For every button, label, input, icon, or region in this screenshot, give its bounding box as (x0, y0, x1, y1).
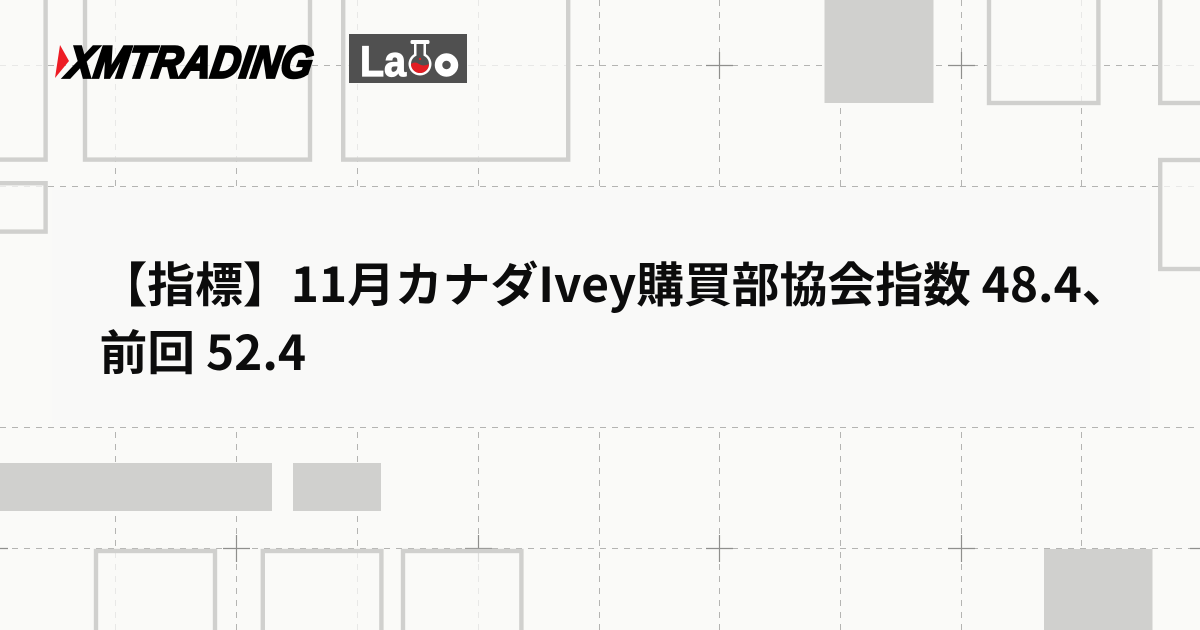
logo: XMTRADING (55, 42, 317, 80)
logo: Lab (349, 34, 467, 83)
logo letter o (438, 57, 454, 73)
title: 【指標】11月カナダIvey購買部協会指数 48.4、 (100, 247, 1130, 316)
title: 前回 52.4 (100, 315, 306, 384)
logo plate (349, 34, 467, 83)
icon: flask (408, 40, 432, 76)
icon: red arrow (55, 45, 69, 78)
title (100, 247, 1130, 384)
